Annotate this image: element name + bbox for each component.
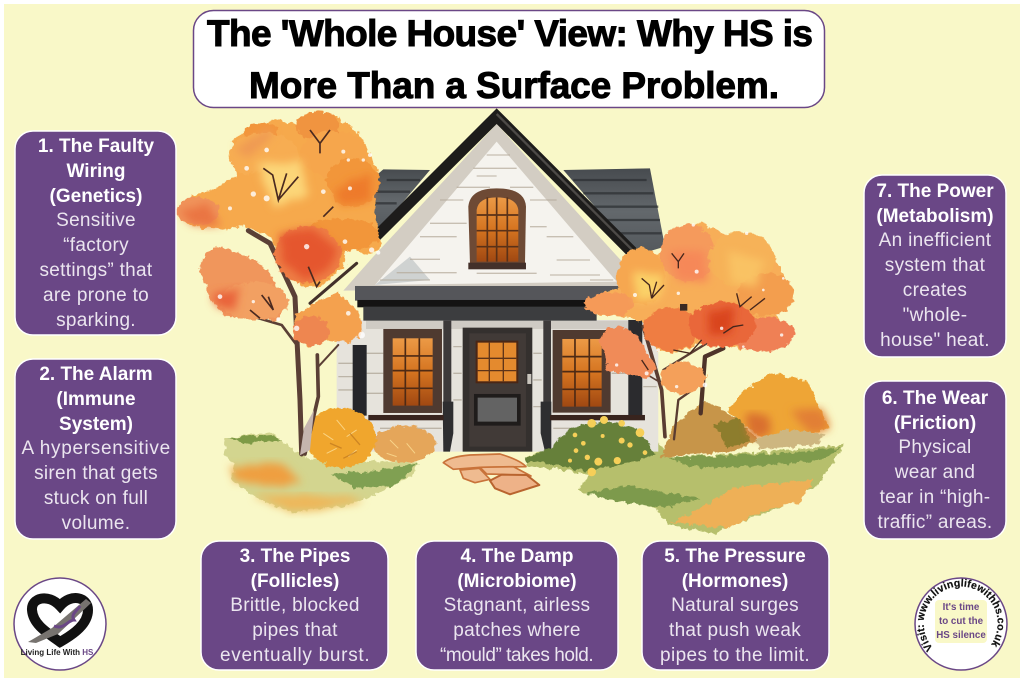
text: 2: volume. [62, 513, 130, 534]
text: 3: eventually burst. [220, 645, 370, 666]
callout: silence: It's time [943, 602, 980, 613]
heading: 7: 7. The Power [876, 181, 994, 202]
text: 4: “mould” takes hold. [440, 645, 594, 666]
panel: 1 genetics [15, 131, 176, 335]
fascia [355, 286, 620, 301]
illustration: house with autumn trees [178, 108, 847, 537]
posts [353, 345, 367, 416]
text: 2: stuck on full [44, 488, 148, 509]
title [194, 10, 824, 108]
panel: 3 follicles [201, 541, 388, 670]
heading: 1 [38, 136, 154, 207]
panel: 4 microbiome [416, 541, 618, 670]
text: 2 [22, 438, 170, 534]
lower walls [337, 320, 658, 452]
text: 3 [220, 595, 370, 666]
icon: heart and scalpel [28, 598, 91, 643]
title: The 'Whole House' View: Why HS is [207, 13, 813, 54]
heading: 2: (Immune [56, 389, 136, 410]
heading: 7: (Metabolism) [876, 206, 994, 227]
heading: 6 [882, 388, 989, 434]
text: 5: Natural surges [671, 595, 799, 616]
callout: silence: HS silence [936, 630, 986, 641]
text: 6: Physical [898, 437, 972, 458]
door [463, 328, 532, 452]
text: 1: settings” that [40, 260, 153, 281]
heading: 1: 1. The Faulty [38, 136, 154, 157]
right tree [587, 223, 797, 439]
text: 1 [40, 210, 153, 331]
heading: 7 [876, 181, 994, 227]
arched window [468, 188, 526, 269]
left porch shrubs [308, 410, 438, 470]
text: 7: system that [885, 255, 986, 276]
panel: 5 hormones [642, 541, 829, 670]
heading: 4: (Microbiome) [457, 571, 577, 592]
text: 1: Sensitive [56, 210, 136, 231]
text: 4: patches where [453, 620, 581, 641]
text: 3: Brittle, blocked [230, 595, 360, 616]
text: 2: A hypersensitive [22, 438, 170, 459]
heading: 6: 6. The Wear [882, 388, 989, 409]
text: 3: pipes that [252, 620, 338, 641]
gable [343, 124, 627, 291]
text: 5 [660, 595, 810, 666]
green flowering shrub [527, 416, 658, 476]
text: website arc: Visit: www.livinglifewithhs.co.uk [917, 578, 1004, 653]
heading: 2 [39, 364, 153, 435]
right ground and shrubs [530, 375, 847, 537]
text: 6: traffic” areas. [877, 512, 993, 533]
heading: 1: Wiring [67, 161, 125, 182]
heading: 3 [240, 546, 350, 592]
text: 1: “factory [63, 235, 129, 256]
title: More Than a Surface Problem. [249, 65, 779, 106]
text: 2: siren that gets [34, 463, 158, 484]
text: 7: "whole- [903, 305, 967, 326]
text: 1: are prone to [43, 285, 149, 306]
left window [368, 329, 444, 420]
heading: 5: 5. The Pressure [664, 546, 806, 567]
text: 6: tear in “high- [880, 487, 990, 508]
heading: 1: (Genetics) [50, 186, 142, 207]
callout: silence [935, 600, 987, 643]
text: 6: wear and [894, 462, 975, 483]
heading: 4 [457, 546, 577, 592]
panel: 2 immune system [15, 359, 176, 539]
heading: 5 [664, 546, 806, 592]
heading: 4: 4. The Damp [461, 546, 573, 567]
panel: 7 metabolism [864, 175, 1006, 357]
text: 6 [877, 437, 993, 533]
heading: 6: (Friction) [894, 413, 976, 434]
heading: 2: System) [59, 414, 133, 435]
text: 4 [440, 595, 594, 666]
text: 5: pipes to the limit. [660, 645, 810, 666]
text: 7 [879, 230, 992, 351]
house [335, 108, 665, 452]
heading: 5: (Hormones) [682, 571, 788, 592]
heading: 3: (Follicles) [251, 571, 339, 592]
callout: silence: to cut the [939, 616, 984, 627]
rake [368, 108, 638, 260]
left ground [227, 435, 420, 515]
icon: stepping stones [443, 454, 539, 494]
left tree [178, 113, 383, 455]
panel: 6 friction [864, 381, 1006, 539]
text: 4: Stagnant, airless [444, 595, 590, 616]
text: 7: An inefficient [879, 230, 992, 251]
text: 1: sparking. [56, 310, 136, 331]
text: logo name: Living Life With HS [21, 648, 94, 657]
logo: Living Life With HS [14, 578, 106, 670]
heading: 3: 3. The Pipes [240, 546, 350, 567]
right window [550, 330, 645, 420]
logo: website badge [914, 577, 1008, 671]
roof shingles [335, 169, 430, 233]
text: 5: that push weak [669, 620, 801, 641]
heading: 2: 2. The Alarm [39, 364, 153, 385]
text: 7: house" heat. [880, 330, 990, 351]
text: 7: creates [903, 280, 967, 301]
